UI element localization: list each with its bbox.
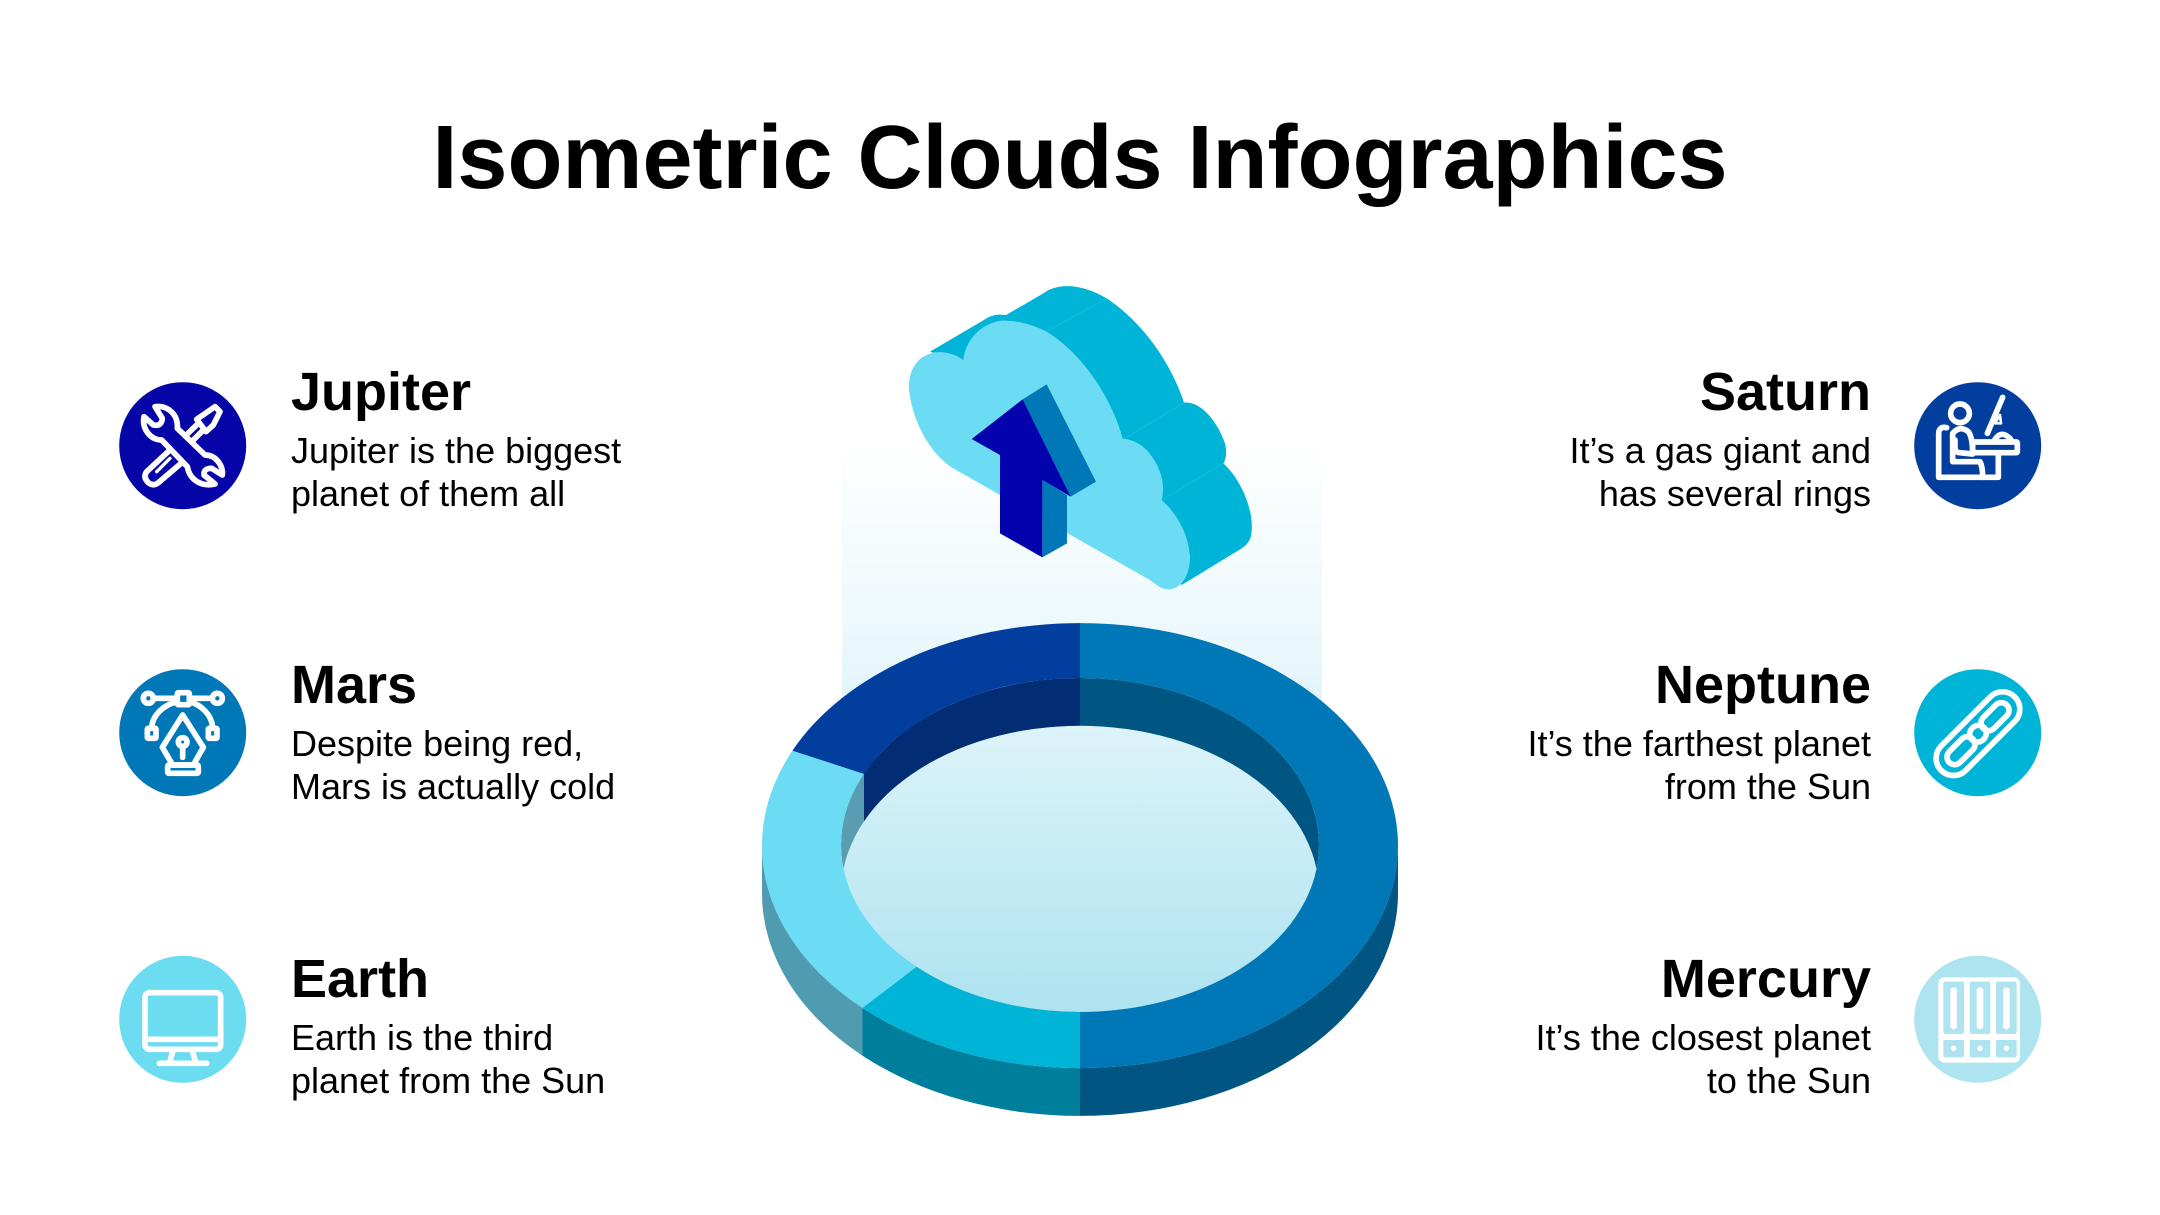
arrow front xyxy=(972,399,1071,557)
text: Neptune description: It’s the farthest planet xyxy=(1527,723,1871,764)
icon: desktop monitor xyxy=(119,956,246,1083)
icon: wrench and screwdriver xyxy=(119,382,246,509)
heading: Jupiter: Jupiter xyxy=(291,362,471,422)
ring segment: top dark blue xyxy=(792,623,1080,774)
item: Neptune xyxy=(1527,655,2041,807)
text: Mercury description: to the Sun xyxy=(1707,1060,1871,1101)
text: Jupiter description: planet of them all xyxy=(291,473,565,514)
text: Saturn description: has several rings xyxy=(1599,473,1871,514)
text: Earth description: Earth is the third xyxy=(291,1017,553,1058)
heading: Saturn: Saturn xyxy=(1700,362,1871,422)
item: Mercury xyxy=(1535,949,2041,1101)
heading: Mars: Mars xyxy=(291,655,417,715)
text: Neptune description: from the Sun xyxy=(1665,766,1871,807)
ring segment: right blue xyxy=(1080,623,1398,1068)
icon: pen tool xyxy=(119,669,246,796)
item: Saturn xyxy=(1569,362,2041,514)
icon: binders xyxy=(1914,956,2041,1083)
icon: person at desk xyxy=(1914,382,2041,509)
heading: Neptune: Neptune xyxy=(1655,655,1871,715)
ring segment: bottom cyan xyxy=(862,967,1080,1068)
item: Earth xyxy=(119,949,605,1101)
text: Earth description: planet from the Sun xyxy=(291,1060,605,1101)
ring segment: left light blue xyxy=(762,751,916,1008)
text: Mars description: Despite being red, xyxy=(291,723,583,764)
item: Jupiter xyxy=(119,362,621,514)
text: Jupiter description: Jupiter is the biggest xyxy=(291,430,621,471)
ring outer side walls xyxy=(762,846,1398,1116)
icon: chain link xyxy=(1914,669,2041,796)
ring inner walls and floor xyxy=(841,678,1319,1012)
isometric segmented ring xyxy=(762,623,1398,1116)
text: Mercury description: It’s the closest planet xyxy=(1535,1017,1871,1058)
cloud seams xyxy=(1047,298,1223,500)
text: Mars description: Mars is actually cold xyxy=(291,766,615,807)
arrow side xyxy=(1023,384,1096,557)
heading: Mercury: Mercury xyxy=(1661,949,1871,1009)
title: Isometric Clouds Infographics xyxy=(432,108,1728,208)
heading: Earth: Earth xyxy=(291,949,429,1009)
item: Mars xyxy=(119,655,615,807)
cloud front xyxy=(909,321,1190,589)
cloud side xyxy=(930,286,1252,585)
text: Saturn description: It’s a gas giant and xyxy=(1569,430,1871,471)
light beam gradient xyxy=(842,440,1322,800)
icon: isometric cloud with upload arrow xyxy=(909,286,1252,589)
